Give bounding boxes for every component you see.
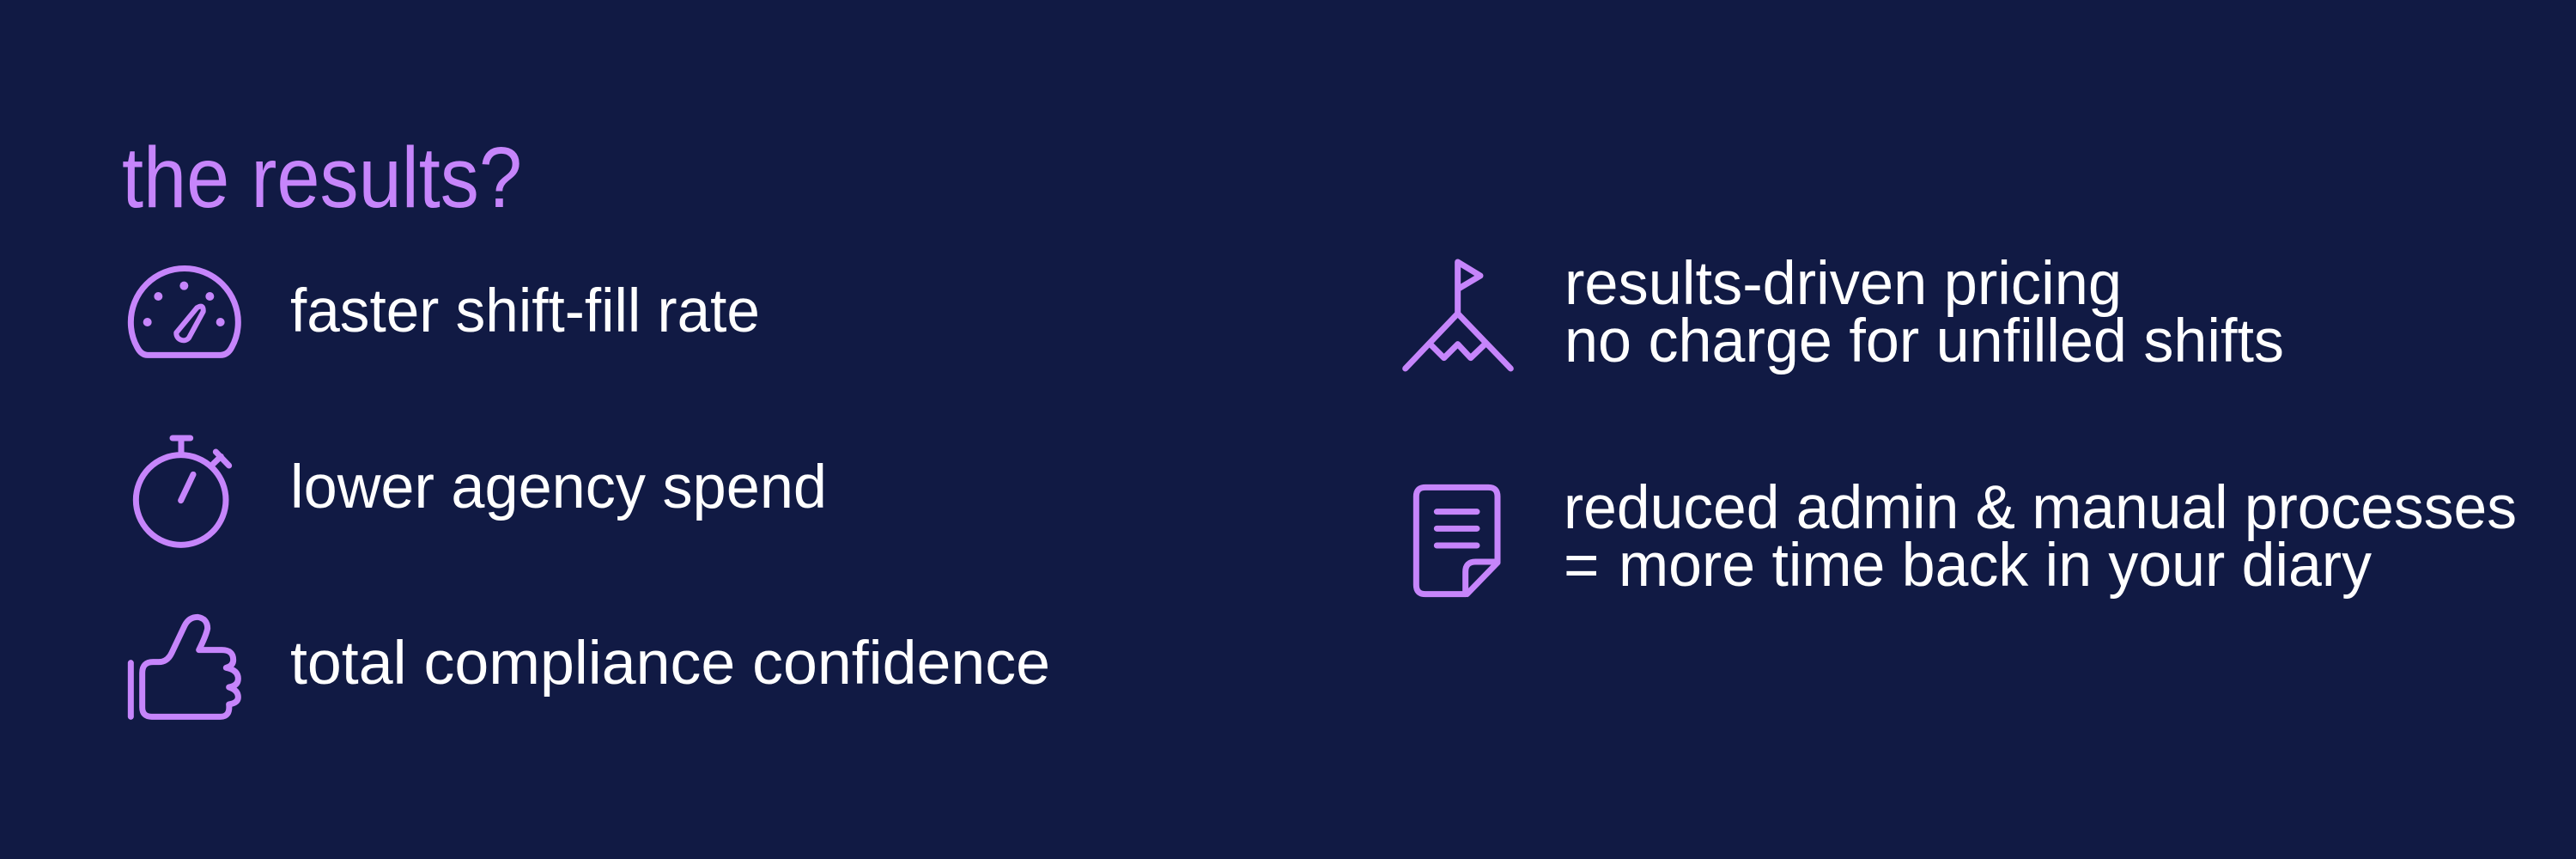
text: reduced admin <box>1564 474 2517 600</box>
icon: speedometer gauge <box>131 269 238 355</box>
text: reduced admin: reduced admin & manual processes <box>1564 474 2517 542</box>
text: reduced admin: more time back in your diary <box>1619 532 2372 600</box>
label: total compliance confidence: total compliance confidence <box>290 630 1050 698</box>
text: reduced admin: = <box>1564 532 1599 600</box>
result: lower agency spend <box>136 438 827 545</box>
result: results-driven pricing <box>1406 250 2284 375</box>
result: faster shift-fill rate <box>131 269 760 355</box>
icon: stopwatch <box>136 438 229 545</box>
icon: thumbs up <box>131 617 238 716</box>
panel: right results list <box>1406 250 2517 600</box>
icon: mountain with flag <box>1406 262 1510 369</box>
label: faster shift-fill rate: faster shift-fill rate <box>290 277 760 345</box>
result: total compliance confidence <box>131 617 1050 716</box>
label: lower agency spend: lower agency spend <box>290 454 827 521</box>
title: the results? <box>122 130 522 226</box>
text: results-driven pricing: results-driven pricing <box>1564 250 2122 318</box>
result: reduced admin <box>1416 474 2517 600</box>
text: results-driven pricing <box>1564 250 2284 375</box>
text: results-driven pricing: no charge for unfilled shifts <box>1564 308 2284 375</box>
panel: left results list <box>131 269 1050 716</box>
icon: document <box>1416 487 1498 594</box>
